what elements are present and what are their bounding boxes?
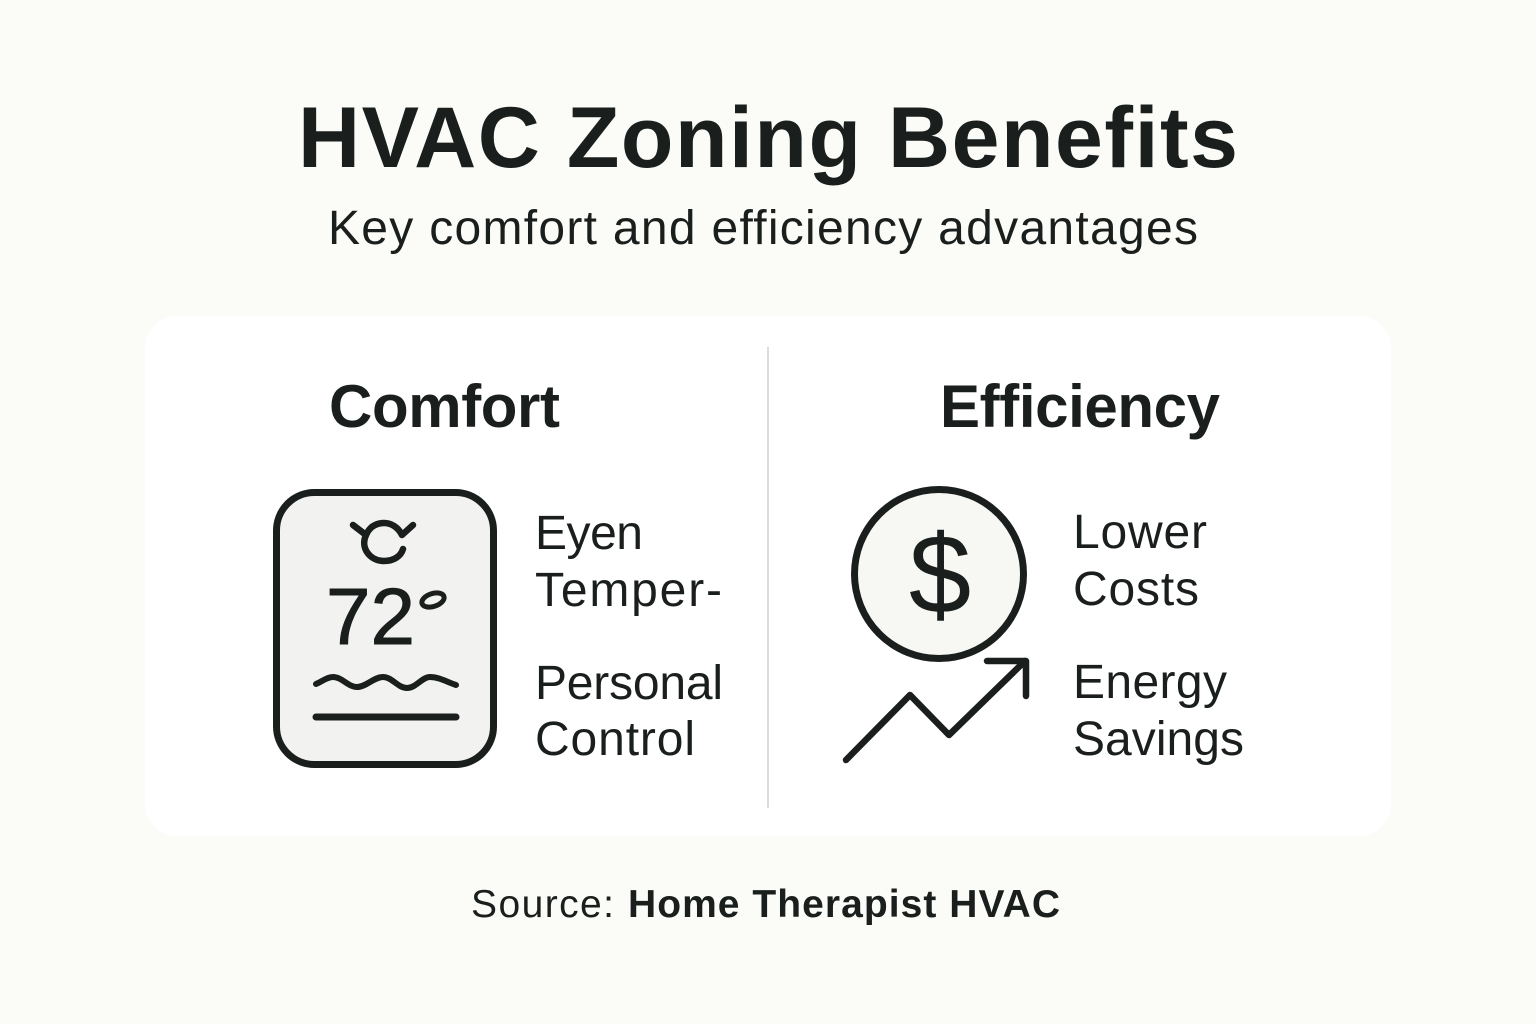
icon: dollar coin: $ bbox=[909, 512, 971, 637]
title: HVAC Zoning Benefits bbox=[298, 90, 1238, 186]
text: even temperature: Temper- bbox=[535, 564, 722, 617]
panel: benefits card bbox=[145, 316, 1391, 836]
source line: Source: bbox=[471, 883, 614, 926]
icon: rising arrow bbox=[846, 661, 1026, 760]
text: personal control: Control bbox=[535, 713, 695, 766]
source line: Home Therapist HVAC bbox=[628, 883, 1060, 926]
text: energy savings: Savings bbox=[1073, 713, 1244, 766]
text: even temperature: Eyen bbox=[535, 507, 643, 560]
text: energy savings: Energy bbox=[1073, 656, 1227, 709]
heading: efficiency: Efficiency bbox=[940, 373, 1221, 440]
base line bbox=[316, 714, 456, 720]
text: lower costs: Costs bbox=[1073, 563, 1199, 616]
icon: sun symbol bbox=[353, 523, 413, 561]
temperature reading: 72 bbox=[326, 572, 415, 661]
wave line bbox=[316, 677, 456, 688]
heading: comfort: Comfort bbox=[329, 373, 560, 440]
text: personal control bbox=[535, 657, 723, 766]
text: personal control: Personal bbox=[535, 657, 723, 710]
icon: dollar coin bbox=[854, 490, 1024, 658]
text: even temperature bbox=[535, 507, 722, 617]
subtitle: Key comfort and efficiency advantages bbox=[328, 202, 1198, 255]
text: lower costs: Lower bbox=[1073, 506, 1207, 559]
degree mark bbox=[420, 590, 446, 610]
text: lower costs bbox=[1073, 506, 1207, 616]
text: energy savings bbox=[1073, 656, 1244, 766]
icon: thermostat bbox=[276, 492, 494, 764]
